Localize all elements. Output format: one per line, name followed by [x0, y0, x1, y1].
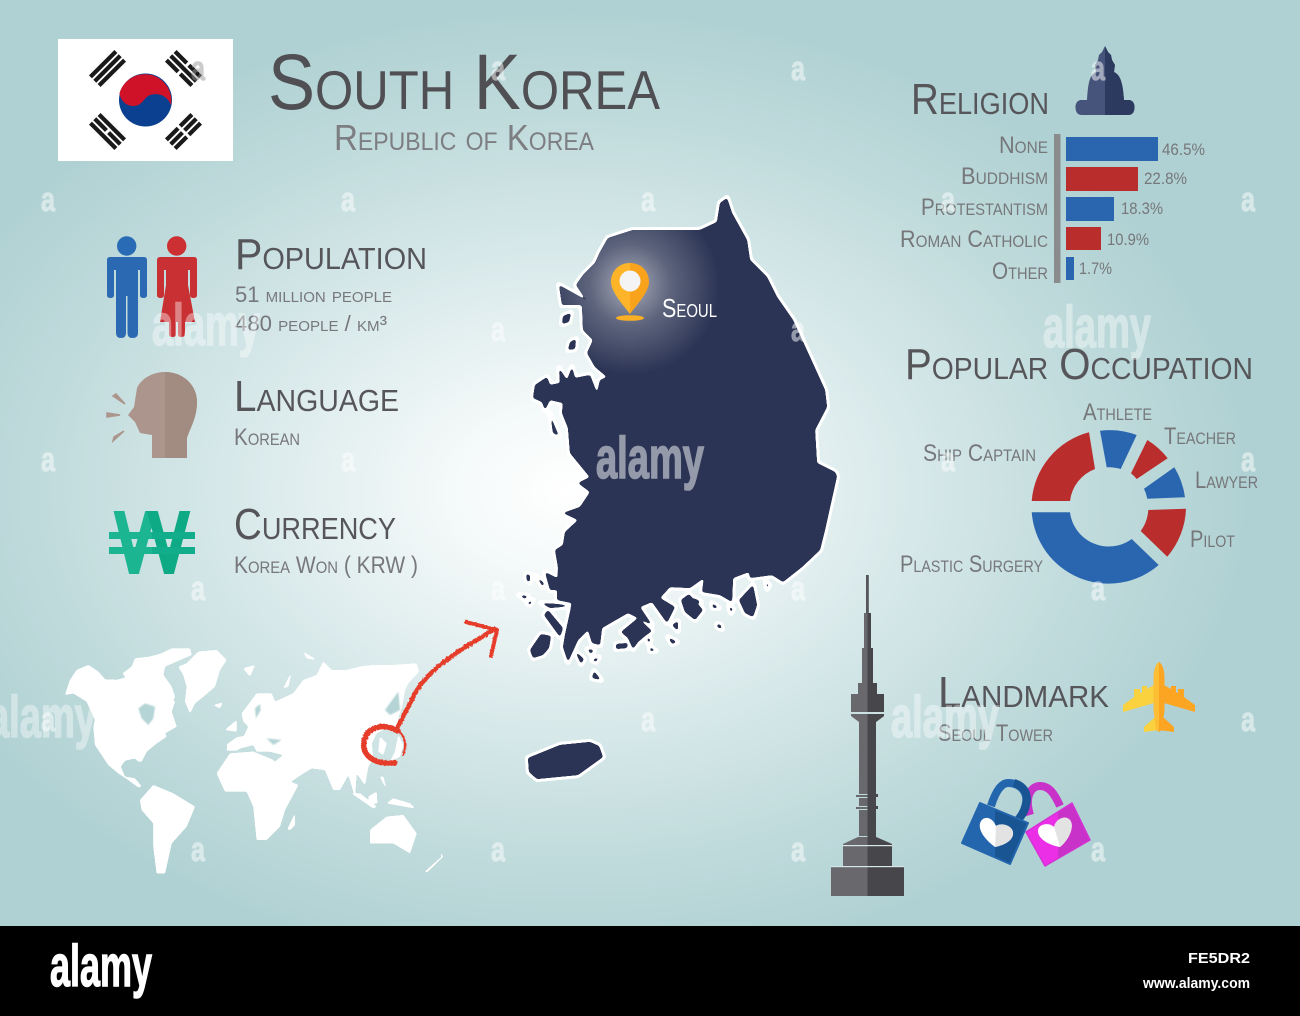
- landmark value: Seoul Tower: [938, 720, 1053, 747]
- title: South Korea: [268, 37, 660, 126]
- panel: currency: [109, 508, 417, 578]
- watermarks: a: [941, 441, 956, 479]
- watermarks: a: [1091, 570, 1106, 608]
- heading: population: Population: [235, 230, 427, 279]
- panel: religion: [900, 46, 1205, 285]
- panel: population: [107, 230, 427, 338]
- footer image id: FE5DR2: [1188, 950, 1250, 967]
- row: protestantism: [921, 194, 1163, 221]
- currency value: Korea Won ( KRW ): [234, 552, 418, 579]
- icon: woman: [157, 236, 197, 337]
- row: roman catholic: Roman Catholic: [900, 226, 1048, 253]
- watermarks: a: [491, 311, 506, 349]
- subtitle: Republic of Korea: [334, 117, 594, 158]
- arrow: location pointer to Korea: [364, 622, 497, 763]
- map land: [519, 198, 837, 779]
- row: other: [992, 257, 1112, 285]
- watermarks: a: [941, 181, 956, 219]
- watermarks: a: [341, 441, 356, 479]
- icon: love locks: [962, 783, 1090, 866]
- heading: religion: Religion: [911, 75, 1049, 124]
- heading: currency: Currency: [234, 500, 396, 549]
- watermarks: a: [341, 701, 356, 739]
- world map: [65, 648, 443, 873]
- row: buddhism: Buddhism: [961, 163, 1048, 190]
- watermarks: alamy: [1043, 295, 1151, 360]
- watermarks: [0, 50, 1256, 869]
- panel: landmark: [831, 575, 1195, 896]
- icon: Seoul pin: [611, 263, 649, 321]
- watermarks: a: [191, 831, 206, 869]
- row: protestantism: Protestantism: [921, 194, 1048, 221]
- icon: Buddha: [1075, 46, 1135, 115]
- row: protestantism: 18.3%: [1121, 199, 1163, 218]
- watermarks: alamy: [152, 293, 260, 358]
- label: pilot: Pilot: [1190, 526, 1235, 553]
- watermarks: a: [41, 441, 56, 479]
- watermarks: a: [491, 570, 506, 608]
- watermarks: a: [191, 570, 206, 608]
- map: South Korea: [519, 195, 837, 779]
- watermarks: a: [341, 181, 356, 219]
- icon: airplane: [1123, 662, 1195, 732]
- heading: landmark: Landmark: [938, 668, 1109, 717]
- row: roman catholic: 10.9%: [1107, 230, 1149, 249]
- footer bar: [0, 926, 1300, 1016]
- religion bar chart: [900, 132, 1205, 285]
- map outline: [519, 198, 837, 779]
- panel: language: [107, 372, 399, 458]
- Seoul glow: [560, 230, 712, 366]
- watermarks: alamy: [596, 426, 704, 491]
- label: ship captain: Ship Captain: [923, 440, 1036, 467]
- row: buddhism: 22.8%: [1144, 169, 1187, 188]
- watermarks: a: [791, 570, 806, 608]
- panel: popular occupation: [900, 340, 1258, 584]
- donut chart: [1032, 430, 1186, 584]
- label: lawyer: Lawyer: [1195, 467, 1258, 494]
- watermarks: alamy: [891, 685, 999, 750]
- watermarks: a: [1241, 181, 1256, 219]
- row: none: None: [999, 132, 1048, 159]
- watermarks: a: [1241, 701, 1256, 739]
- watermarks: a: [641, 701, 656, 739]
- icon: South Korea flag: [58, 39, 233, 161]
- watermarks: a: [791, 50, 806, 88]
- population count: 51 million people: [235, 282, 392, 307]
- label: Seoul: Seoul: [662, 293, 717, 323]
- row: roman catholic: [900, 226, 1149, 253]
- row: buddhism: [961, 163, 1187, 191]
- row: other: 1.7%: [1079, 259, 1112, 278]
- watermarks: a: [1091, 50, 1106, 88]
- watermarks: a: [791, 831, 806, 869]
- label: plastic surgery: Plastic Surgery: [900, 551, 1043, 578]
- icon: Seoul Tower: [831, 575, 904, 896]
- watermarks: a: [191, 50, 206, 88]
- icon: man: [107, 236, 147, 338]
- footer logo: alamy: [50, 934, 152, 999]
- icon: won sign: [109, 503, 195, 572]
- watermarks: a: [1091, 831, 1106, 869]
- watermarks: a: [791, 311, 806, 349]
- watermarks: a: [1241, 441, 1256, 479]
- row: other: Other: [992, 258, 1048, 285]
- label: teacher: Teacher: [1164, 423, 1236, 450]
- population density: 480 people / km³: [235, 311, 387, 336]
- row: none: [999, 132, 1205, 161]
- watermarks: a: [491, 831, 506, 869]
- row: none: 46.5%: [1162, 140, 1205, 159]
- watermarks: a: [641, 181, 656, 219]
- icon: speaking head: [107, 372, 197, 458]
- footer url: www.alamy.com: [1142, 975, 1250, 992]
- watermarks: a: [491, 50, 506, 88]
- heading: popular occupation: Popular Occupation: [905, 340, 1253, 389]
- label: athlete: Athlete: [1083, 399, 1152, 426]
- watermarks: a: [41, 701, 56, 739]
- watermarks: a: [41, 181, 56, 219]
- language value: Korean: [234, 424, 300, 451]
- heading: language: Language: [234, 372, 399, 421]
